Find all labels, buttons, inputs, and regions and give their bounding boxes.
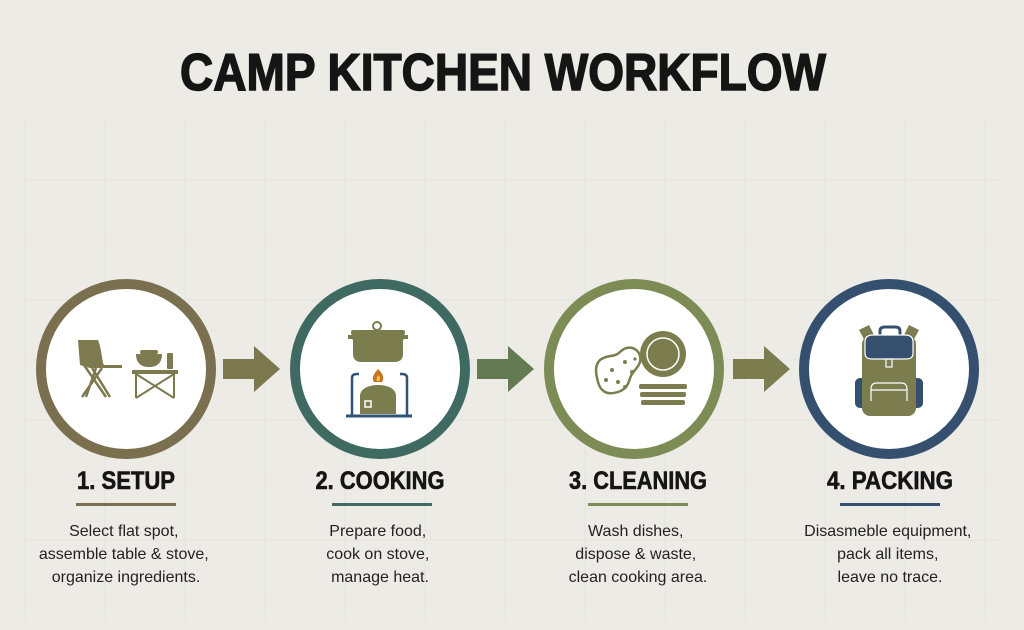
circle: setup <box>41 284 211 454</box>
text: cleaning description: clean cooking area. <box>569 569 707 586</box>
text: packing description: Disasmeble equipment, <box>804 523 971 540</box>
text: cleaning description: Wash dishes, <box>588 523 684 540</box>
text: cleaning description: dispose & waste, <box>575 546 696 563</box>
heading: 4. PACKING: 4. PACKING <box>827 467 953 495</box>
heading: 3. CLEANING: 3. CLEANING <box>569 467 707 495</box>
text: cooking description: cook on stove, <box>326 546 429 563</box>
heading: 1. SETUP: 1. SETUP <box>77 467 175 495</box>
arrow 2 <box>477 346 534 392</box>
step 2: cooking <box>295 284 465 454</box>
arrow 1 <box>223 346 280 392</box>
step 1: setup <box>41 284 211 454</box>
step 3: cleaning <box>549 284 719 454</box>
heading: 2. COOKING: 2. COOKING <box>316 467 444 495</box>
text: packing description: pack all items, <box>837 546 938 563</box>
icon: stove with pot <box>346 322 412 416</box>
text: packing description: leave no trace. <box>838 569 942 586</box>
icon: sponge and plates <box>596 331 687 405</box>
icon: chair and table <box>78 340 178 398</box>
icon: backpack <box>855 325 923 416</box>
circle: cleaning <box>549 284 719 454</box>
text: setup description: Select flat spot, <box>69 523 178 540</box>
circle: packing <box>804 284 974 454</box>
text: cooking description: manage heat. <box>331 569 429 586</box>
text: setup description: organize ingredients. <box>52 569 200 586</box>
step 4: packing <box>804 284 974 454</box>
text: cooking description: Prepare food, <box>329 523 426 540</box>
arrow 3 <box>733 346 790 392</box>
circle: cooking <box>295 284 465 454</box>
text: setup description: assemble table & stove, <box>39 546 209 563</box>
title: CAMP KITCHEN WORKFLOW <box>180 44 827 102</box>
